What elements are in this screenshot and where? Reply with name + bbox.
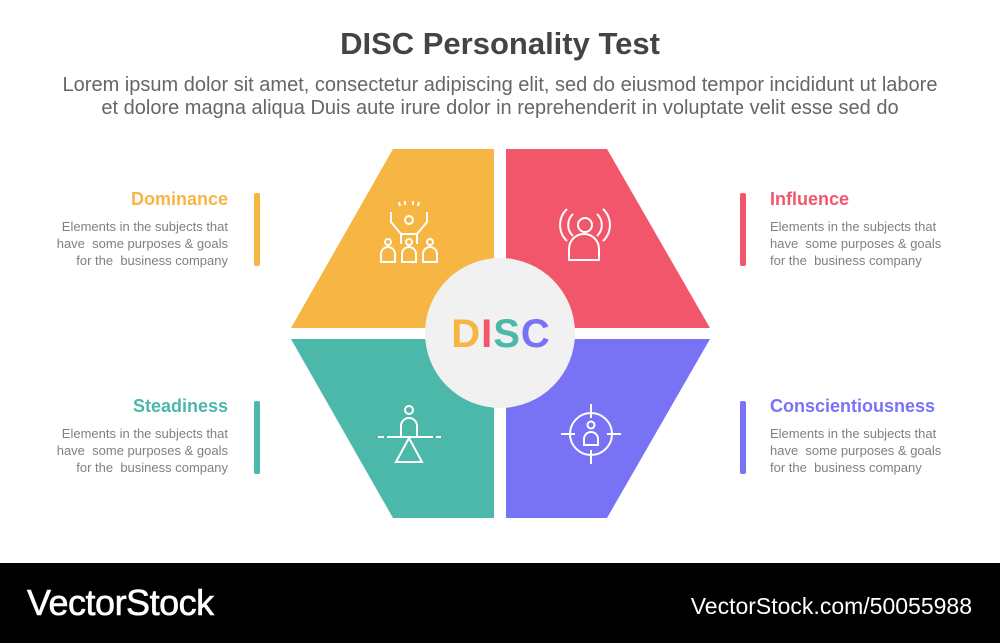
- segment C: [506, 339, 710, 518]
- center circle: DISC: [451, 312, 551, 356]
- text: Conscientiousness: have some purposes & goals: [770, 443, 941, 458]
- text: Influence: for the business company: [770, 253, 922, 268]
- text: Steadiness: have some purposes & goals: [57, 443, 228, 458]
- text: Dominance: Dominance: [131, 189, 228, 209]
- text: Steadiness: Steadiness: [133, 396, 228, 416]
- segment S: [291, 339, 494, 518]
- text: Steadiness: [57, 396, 228, 475]
- text: Influence: have some purposes & goals: [770, 236, 941, 251]
- segment D: [291, 149, 494, 328]
- text: Conscientiousness: for the business company: [770, 460, 922, 475]
- bar: Steadiness: [254, 401, 260, 474]
- text: Dominance: [57, 189, 228, 268]
- text: Dominance: for the business company: [76, 253, 228, 268]
- subtitle: Lorem ipsum dolor sit amet, consectetur adipiscing elit, sed do eiusmod tempor incididunt ut labore: [63, 74, 937, 96]
- bar: Influence: [740, 193, 746, 266]
- subtitle: et dolore magna aliqua Duis aute irure dolor in reprehenderit in voluptate velit esse sed do: [101, 97, 899, 119]
- text: Dominance: have some purposes & goals: [57, 236, 228, 251]
- title: DISC Personality Test: [340, 26, 660, 61]
- footer: [0, 563, 1000, 643]
- subtitle: [63, 74, 937, 119]
- text: Conscientiousness: [770, 396, 941, 475]
- text: Conscientiousness: Conscientiousness: [770, 396, 935, 416]
- text: Steadiness: for the business company: [76, 460, 228, 475]
- text: Dominance: Elements in the subjects that: [62, 219, 228, 234]
- footer logo: VectorStock: [27, 582, 214, 623]
- segment I: [506, 149, 710, 328]
- text: Influence: Influence: [770, 189, 849, 209]
- text: Influence: Elements in the subjects that: [770, 219, 936, 234]
- text: Influence: [770, 189, 941, 268]
- text: Conscientiousness: Elements in the subjects that: [770, 426, 936, 441]
- center circle: [425, 258, 575, 408]
- footer url: VectorStock.com/50055988: [691, 593, 972, 619]
- bar: Dominance: [254, 193, 260, 266]
- bar: Conscientiousness: [740, 401, 746, 474]
- text: Steadiness: Elements in the subjects that: [62, 426, 228, 441]
